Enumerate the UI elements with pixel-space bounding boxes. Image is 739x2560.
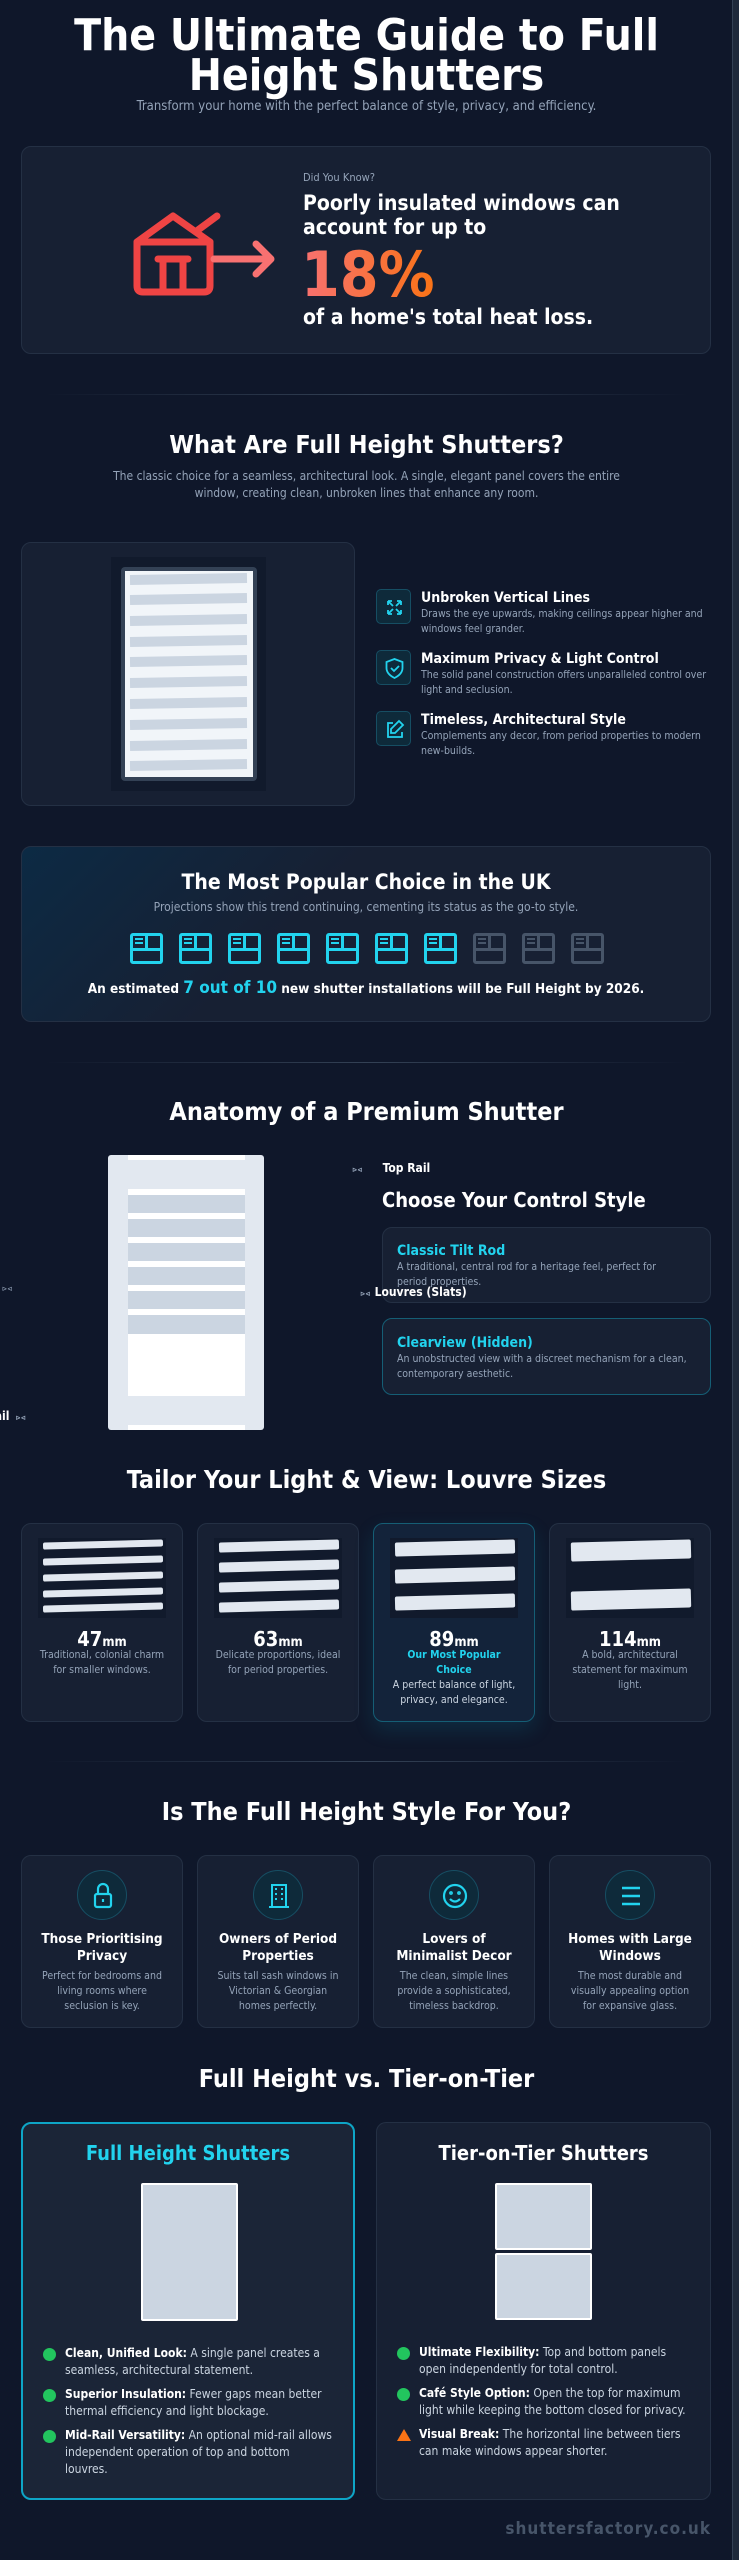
panel: full height: Full Height Shutters [86,2141,290,2165]
subtitle: Transform your home with the perfect balance of style, privacy, and efficiency. [137,99,596,114]
panel: most popular in UK [21,846,711,1022]
heading: what are: What Are Full Height Shutters? [169,430,564,459]
heading: control style: Choose Your Control Style [382,1188,646,1212]
panel: tier on tier [376,2122,711,2500]
list: pros and cons: Café Style Option: Open the top for maximum light while keeping the bottom closed for privacy. [419,2386,686,2417]
list: pros and cons: Visual Break: The horizontal line between tiers can make windows appear shorter. [419,2427,681,2458]
card: period: Owners of Period Properties [219,1931,337,1964]
heading: anatomy: Anatomy of a Premium Shutter [169,1097,564,1126]
card: 47mm: Traditional, colonial charm for smaller windows. [40,1649,164,1676]
card: 89mm popular: Our Most Popular [407,1649,501,1661]
heading: louvre sizes: Tailor Your Light & View: Louvre Sizes [127,1465,606,1494]
list: pros and cons: Ultimate Flexibility: Top and bottom panels open independently for total control. [419,2345,666,2376]
icon: smile [429,1870,479,1920]
card: classic tilt rod: A traditional, central rod for a heritage feel, perfect for period properties. [397,1261,656,1288]
illustration: single panel [141,2183,238,2321]
card: 47mm: 47mm [77,1627,127,1651]
card: 89mm popular: 89mm [429,1627,479,1651]
icon: edit [376,711,411,746]
card: 89mm popular: A perfect balance of light, privacy, and elegance. [393,1679,515,1706]
icon: house heat loss [134,212,274,296]
card: 63mm: Delicate proportions, ideal for period properties. [216,1649,340,1676]
card: minimalist: Lovers of [422,1931,486,1947]
feature: unbroken vertical lines: Unbroken Vertical Lines [421,590,590,606]
card: period [197,1855,359,2028]
card: clearview: An unobstructed view with a discreet mechanism for a clean, contemporary aesthetic. [397,1353,687,1380]
heading: is it for you: Is The Full Height Style For You? [162,1797,571,1826]
card: minimalist: Minimalist Decor [396,1948,512,1964]
card: large windows [549,1855,711,2028]
feature: privacy [376,650,706,696]
panel: tier on tier: Tier-on-Tier Shutters [438,2141,649,2165]
card: privacy: Those Prioritising Privacy [41,1931,163,1964]
text: description: The classic choice for a seamless, architectural look. A single, elegant panel covers the entire window, creating clean, unbroken lines that enhance any room. [113,469,620,500]
panel: stat card [21,146,711,354]
stat text: An estimated 7 out of 10 new shutter installations will be Full Height by 2026. [88,978,644,998]
heading: comparison: Full Height vs. Tier-on-Tier [199,2064,534,2093]
feature: privacy: The solid panel construction offers unparalleled control over light and seclusion. [421,669,706,696]
list: pros: independent operation of top and bottom louvres. [65,2445,290,2476]
card: minimalist: The clean, simple lines provide a sophisticated, timeless backdrop. [397,1970,511,2012]
label: mid rail marker: ⊳⊲ [2,1285,13,1293]
list: pros: Superior Insulation: Fewer gaps mean better thermal efficiency and light blockage. [65,2387,322,2418]
card: period: Suits tall sash windows in Victorian & Georgian homes perfectly. [218,1970,338,2012]
card: 63mm: 63mm [253,1627,303,1651]
card: clearview: Clearview (Hidden) [397,1335,533,1351]
text: stat statement: Poorly insulated windows can account for up to [303,191,620,239]
card: 89mm popular: Choice [436,1664,472,1676]
feature: timeless [376,711,701,757]
text: stat ending: of a home's total heat loss. [303,305,593,329]
label: top rail: ⊳⊲ Top Rail [352,1161,430,1175]
list: pros: Clean, Unified Look: A single panel creates a seamless, architectural statement. [65,2346,320,2377]
panel: shutter illustration [21,542,355,806]
card: 114mm [549,1523,711,1722]
card: 114mm: 114mm [599,1627,661,1651]
card: privacy: Perfect for bedrooms and living rooms where seclusion is key. [42,1970,162,2012]
card: 89mm popular [373,1523,535,1722]
footer: brand: shuttersfactory.co.uk [505,2519,711,2539]
card: large windows: Homes with Large Windows [568,1931,692,1964]
text: did you know: Did You Know? [303,171,375,184]
card: minimalist [373,1855,535,2028]
pictogram: 7 of 10 [130,933,604,964]
panel: full height [21,2122,355,2500]
card: large windows: The most durable and visually appealing option for expansive glass. [571,1970,689,2012]
label: louvres: ⊳⊲ Louvres (Slats) [360,1285,467,1299]
icon: lines [605,1870,655,1920]
card: 47mm [21,1523,183,1722]
card: 63mm [197,1523,359,1722]
subtext: Projections show this trend continuing, cementing its status as the go-to style. [154,900,578,914]
icon: building [253,1870,303,1920]
list: pros [43,2346,332,2476]
feature: unbroken vertical lines [376,589,703,635]
feature: timeless: Complements any decor, from period properties to modern new-builds. [421,730,701,757]
diagram: shutter anatomy [108,1155,264,1430]
feature: timeless: Timeless, Architectural Style [421,712,626,728]
icon: lock [77,1870,127,1920]
list: pros and cons [397,2345,686,2458]
illustration: two panels [495,2183,592,2250]
feature: unbroken vertical lines: Draws the eye upwards, making ceilings appear higher and windows feel grander. [421,608,703,635]
card: classic tilt rod [382,1227,711,1303]
card: 114mm: A bold, architectural statement for maximum light. [572,1649,688,1691]
icon: shield [376,650,411,685]
illustration: full height shutter [111,557,266,791]
icon: expand [376,589,411,624]
card: privacy [21,1855,183,2028]
heading: The Most Popular Choice in the UK [182,870,550,894]
title: The Ultimate Guide to Full Height Shutters [74,10,659,101]
stat number: 18% [301,238,435,311]
card: clearview [382,1318,711,1395]
feature: privacy: Maximum Privacy & Light Control [421,651,659,667]
card: classic tilt rod: Classic Tilt Rod [397,1243,505,1259]
list: pros: Mid-Rail Versatility: An optional mid-rail allows [65,2428,332,2442]
